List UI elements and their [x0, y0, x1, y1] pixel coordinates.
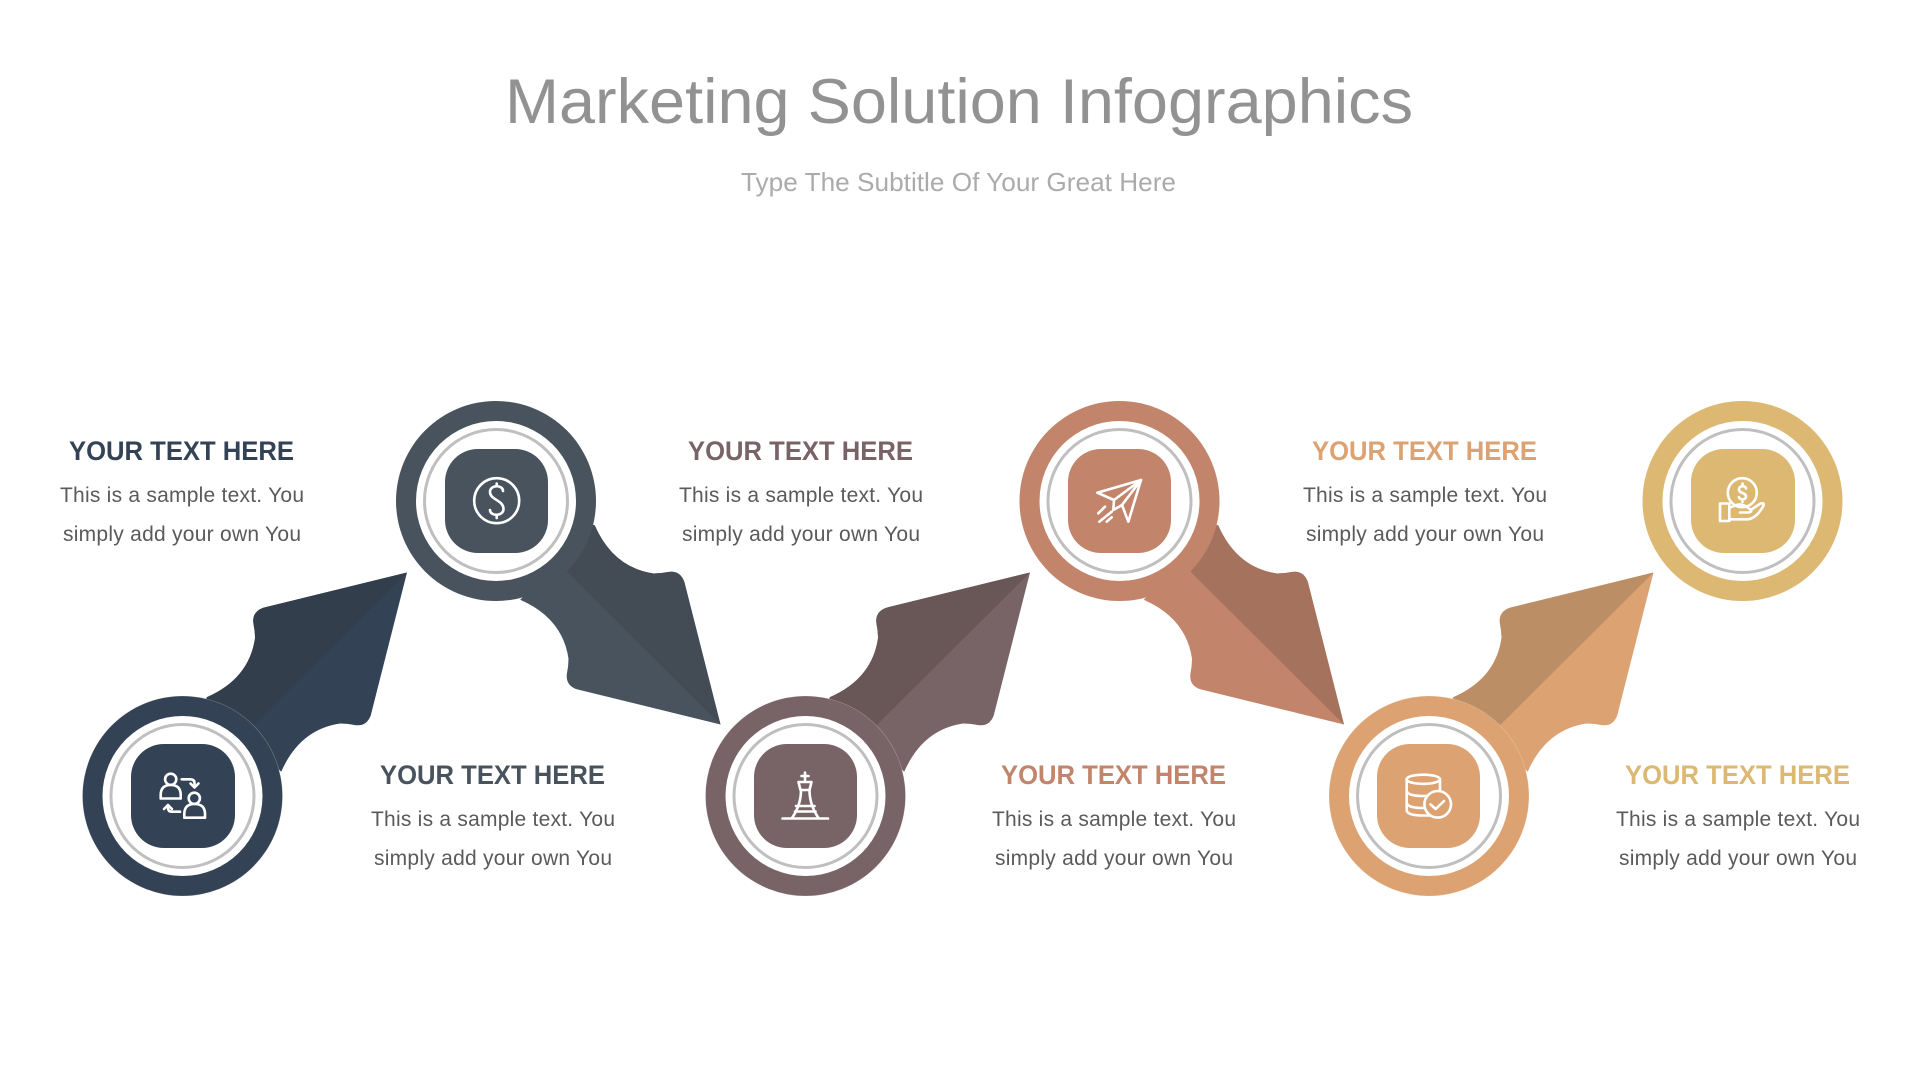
step 1 badge	[82, 696, 282, 896]
arrow: step 2 to 3	[496, 501, 720, 724]
text block: step 6: YOUR TEXT HERE	[1625, 760, 1850, 790]
arrow: step 3 to 4	[806, 572, 1030, 796]
arrow: step 1 to 2	[182, 572, 407, 796]
step 4 badge	[1020, 401, 1220, 601]
text block: step 3: YOUR TEXT HERE	[688, 436, 913, 466]
text block: step 2: This is a sample text. You	[371, 808, 615, 831]
text block: step 4: This is a sample text. You	[992, 808, 1236, 831]
step 2 badge	[396, 401, 596, 601]
title: Marketing Solution Infographics	[505, 67, 1413, 137]
text block: step 6	[1616, 760, 1860, 870]
step 6 badge	[1642, 401, 1842, 601]
icon: chess king	[782, 772, 828, 818]
icon: hand holding coin	[1720, 478, 1764, 521]
text block: step 4: simply add your own You	[995, 847, 1233, 870]
text block: step 5: This is a sample text. You	[1303, 484, 1547, 507]
text block: step 3	[679, 436, 923, 546]
text block: step 5: YOUR TEXT HERE	[1312, 436, 1537, 466]
text block: step 4: YOUR TEXT HERE	[1001, 760, 1226, 790]
icon: dollar coin	[474, 478, 519, 523]
icon: database check	[1407, 775, 1451, 818]
text block: step 2: simply add your own You	[374, 847, 612, 870]
text block: step 3: This is a sample text. You	[679, 484, 923, 507]
text block: step 3: simply add your own You	[682, 523, 920, 546]
icon: paper plane	[1097, 480, 1141, 522]
text block: step 1	[60, 436, 304, 546]
step 5 badge	[1329, 696, 1529, 896]
text block: step 6: simply add your own You	[1619, 847, 1857, 870]
text block: step 5	[1303, 436, 1547, 546]
arrow: step 5 to 6	[1429, 572, 1654, 796]
text block: step 5: simply add your own You	[1306, 523, 1544, 546]
text block: step 1: simply add your own You	[63, 523, 301, 546]
text block: step 1: This is a sample text. You	[60, 484, 304, 507]
step 3 badge	[706, 696, 906, 896]
text block: step 4	[992, 760, 1236, 870]
icon: people exchange	[161, 774, 205, 818]
text block: step 1: YOUR TEXT HERE	[69, 436, 294, 466]
text block: step 6: This is a sample text. You	[1616, 808, 1860, 831]
text block: step 2	[371, 760, 615, 870]
subtitle: Type The Subtitle Of Your Great Here	[741, 167, 1176, 197]
arrow: step 4 to 5	[1120, 501, 1344, 724]
text block: step 2: YOUR TEXT HERE	[380, 760, 605, 790]
